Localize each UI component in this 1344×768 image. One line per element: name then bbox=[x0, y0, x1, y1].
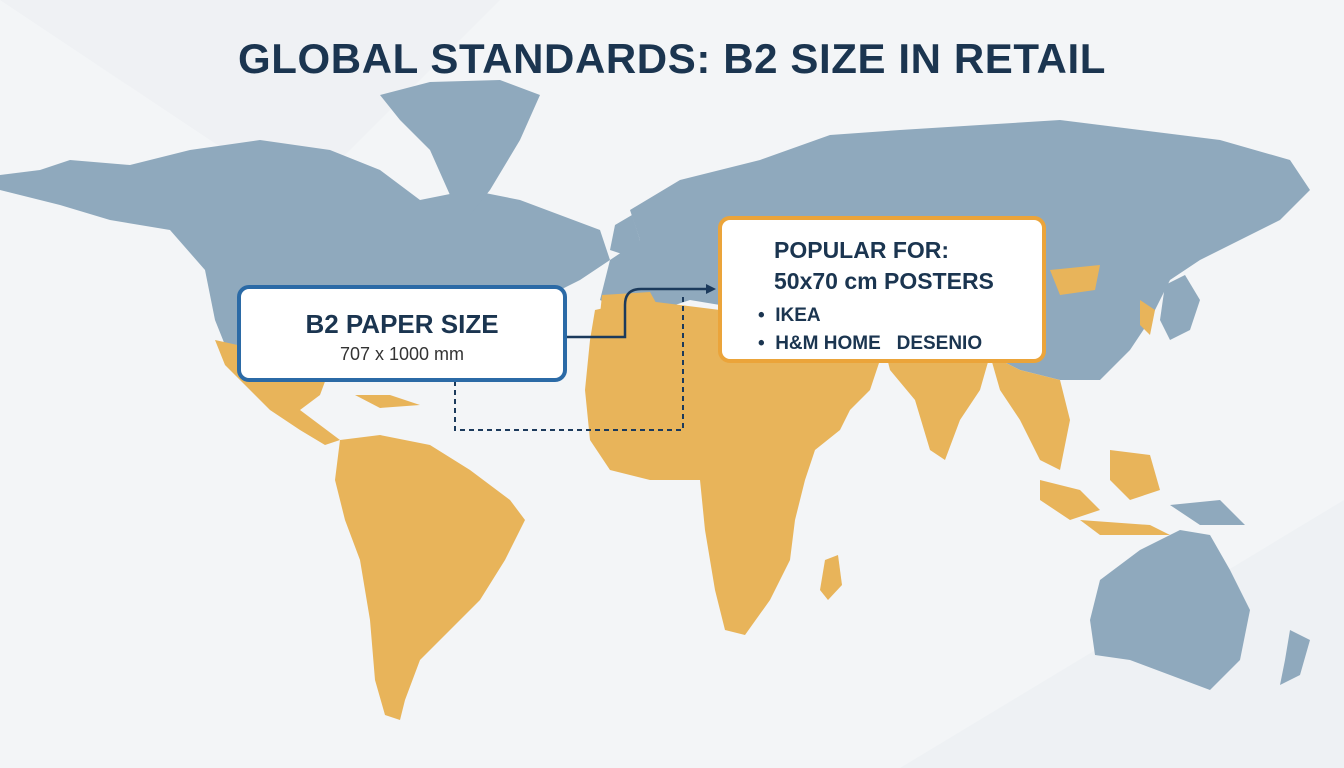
list bbox=[758, 305, 982, 354]
heading: 50x70 cm POSTERS bbox=[774, 268, 994, 294]
se asia bbox=[990, 355, 1070, 470]
dashed line bbox=[455, 296, 683, 430]
australia bbox=[1090, 530, 1250, 690]
new guinea bbox=[1170, 500, 1245, 525]
dimensions: 707 x 1000 mm bbox=[340, 344, 464, 364]
india bbox=[880, 330, 990, 460]
list: • H&M HOME DESENIO bbox=[758, 333, 982, 354]
japan bbox=[1160, 275, 1200, 340]
heading bbox=[774, 237, 994, 294]
caribbean bbox=[355, 395, 420, 408]
greenland bbox=[380, 80, 540, 215]
south america bbox=[335, 435, 525, 720]
heading: POPULAR FOR: bbox=[774, 237, 949, 263]
europe + russia + asia bbox=[600, 120, 1310, 380]
solid arrow bbox=[567, 284, 716, 337]
list: • IKEA bbox=[758, 305, 821, 326]
heading: B2 PAPER SIZE bbox=[305, 309, 499, 339]
madagascar bbox=[820, 555, 842, 600]
uk bbox=[610, 215, 640, 255]
africa + middle east bbox=[585, 300, 880, 635]
mongolia/korea patches bbox=[1050, 265, 1100, 295]
mexico/central america bbox=[215, 340, 340, 445]
title: GLOBAL STANDARDS: B2 SIZE IN RETAIL bbox=[238, 35, 1106, 82]
iberia bbox=[600, 292, 660, 338]
north america (blue) bbox=[0, 80, 1310, 690]
callout: popular for bbox=[718, 216, 1046, 363]
callout: B2 paper size bbox=[237, 285, 567, 382]
